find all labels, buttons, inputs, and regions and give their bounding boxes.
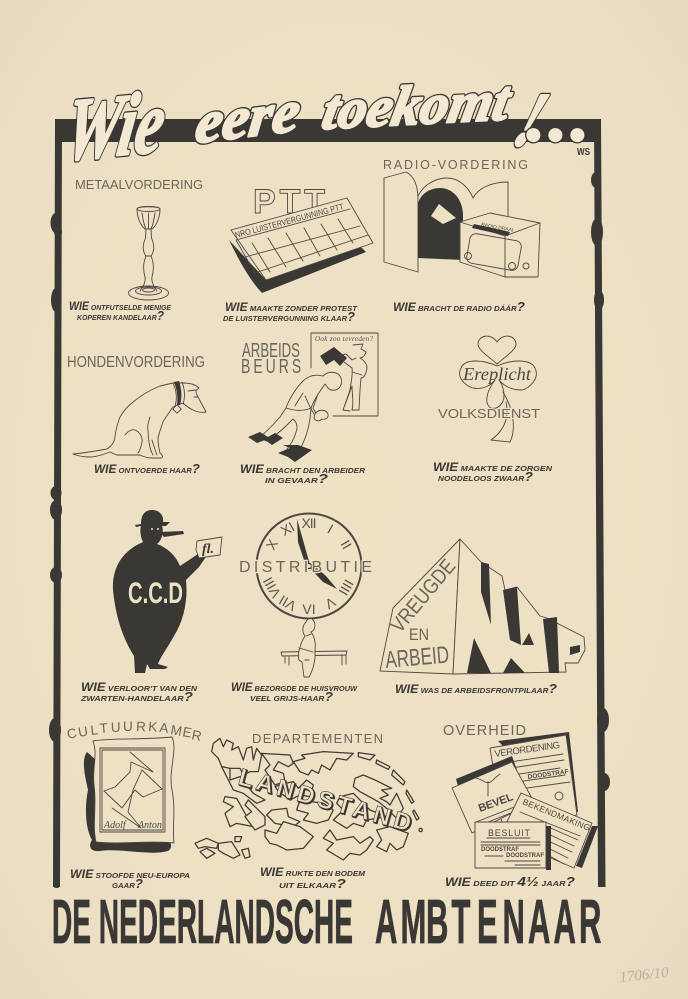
icon: stack of decrees: BESLUIT	[488, 828, 530, 838]
icon: clock: VII	[276, 592, 299, 614]
icon: clock: X	[262, 536, 281, 553]
title: !	[503, 79, 559, 162]
title: eere	[192, 78, 304, 156]
question 1: KOPEREN KANDELAAR?	[77, 308, 164, 323]
question 3: WIE BRACHT DE RADIO DÁÁR ?	[393, 299, 525, 314]
question 2: DE LUISTERVERGUNNING KLAAR?	[223, 309, 355, 324]
icon: framed emblem: Anton	[137, 820, 162, 831]
heading: departementen: DEPARTEMENTEN	[252, 731, 383, 746]
icon: NAF block letters: ARBEID	[384, 642, 450, 674]
title: toekomt	[317, 69, 518, 142]
icon: clock: I	[325, 521, 336, 537]
icon: framed emblem	[84, 737, 174, 853]
question 11: UIT ELKAAR ?	[279, 876, 346, 891]
decorative frame	[49, 119, 610, 888]
icon: NAF block letters	[380, 539, 585, 674]
icon: shattered land map: LANDSTAND	[236, 765, 415, 838]
title: eere	[192, 78, 304, 156]
icon: woman on bench	[281, 619, 347, 677]
icon: NAF block letters: VREUGDE	[386, 555, 460, 637]
heading: distributie: DISTRIBUTIE	[239, 559, 372, 576]
question 2: WIE MAAKTE ZONDER PROTEST	[225, 302, 358, 314]
signature mark: WS	[577, 147, 590, 158]
icon: stack of decrees: DOODSTRAF	[481, 847, 519, 853]
icon: stack of decrees: BEKENDMAKING	[521, 797, 592, 833]
title	[59, 69, 589, 180]
icon: stack of decrees: DOODSTRAF	[527, 768, 569, 781]
icon: doorway and radio: RADIO DRAAI	[481, 222, 514, 234]
question 1: WIE ONTFUTSELDE MENIGE	[69, 301, 172, 313]
question 10	[70, 869, 190, 891]
question 7: WIE VERLOOR'T VAN DEN	[81, 682, 198, 694]
pencil archive number: 1706/10	[619, 965, 670, 986]
icon: fat black marketeer: C.C.D	[128, 577, 183, 610]
heading: cultuurkamer: CULTUURKAMER	[66, 719, 203, 744]
icon: stack of decrees: DOODSTRAF	[506, 853, 544, 859]
icon: clock: VI	[302, 601, 316, 617]
icon: clock: II	[337, 537, 355, 552]
icon: clock: V	[322, 594, 339, 613]
icon: clover	[460, 336, 536, 442]
icon: clock: VIII	[260, 574, 284, 601]
title: ...	[527, 76, 589, 156]
icon: listening licence card: NRO LUISTERVERGUNNING PTT	[234, 201, 345, 240]
question 6: NOODELOOS ZWAAR ?	[438, 469, 533, 484]
icon: clock	[256, 514, 362, 618]
title: Wie	[59, 72, 172, 180]
hollow letters PTT: PTT	[253, 183, 325, 221]
question 2	[223, 302, 358, 324]
question 6: WIE MAAKTE DE ZORGEN	[433, 462, 553, 474]
heading: overheid: OVERHEID	[443, 723, 526, 739]
question 6	[433, 462, 553, 484]
question 5: IN GEVAAR ?	[265, 471, 328, 486]
question 7	[80, 682, 198, 704]
footer title: AMBTENAAR	[375, 889, 601, 957]
icon: doorway and radio	[384, 172, 540, 277]
icon: candlestick	[128, 206, 168, 300]
icon: shattered land map	[195, 738, 422, 860]
icon: clock: IIII	[335, 577, 357, 598]
icon: framed emblem: Adolf	[103, 820, 127, 831]
heading: arbeidsbeurs	[241, 340, 301, 378]
icon: stack of decrees	[452, 732, 598, 870]
title: Wie	[59, 72, 172, 180]
title: toekomt	[317, 69, 518, 142]
icon: listening licence card	[229, 198, 373, 293]
icon: sitting dog	[73, 381, 206, 458]
icon: shattered land map: LANDSTAND	[235, 764, 414, 837]
icon: worker and poster: Ook zoo tevreden?	[315, 335, 374, 343]
question 7: ZWARTEN-HANDELAAR ?	[80, 689, 193, 704]
question 5	[240, 464, 366, 486]
icon: stack of decrees: BEVEL	[477, 791, 515, 815]
heading: radio-vordering: RADIO-VORDERING	[383, 158, 528, 172]
heading: arbeidsbeurs: BEURS	[241, 354, 301, 378]
heading: metaalvordering: METAALVORDERING	[75, 177, 203, 192]
icon: NAF block letters: EN	[409, 625, 429, 644]
question 1	[69, 301, 172, 323]
question 8: WIE BEZORGDE DE HUISVROUW	[231, 682, 358, 694]
icon: clock: XII	[302, 515, 316, 531]
icon: stack of decrees: VERORDENING	[494, 740, 561, 760]
question 11: WIE RUKTE DEN BODEM	[260, 867, 366, 879]
heading: volksdienst: VOLKSDIENST	[438, 406, 540, 421]
icon: worker and poster	[248, 333, 378, 462]
heading: arbeidsbeurs: ARBEIDS	[242, 340, 300, 362]
question 8: VEEL GRIJS-HAAR ?	[250, 689, 333, 704]
question 9: WIE WAS DE ARBEIDSFRONTPILAAR ?	[395, 681, 557, 696]
icon: clock: XI	[278, 519, 297, 539]
question 8	[231, 682, 358, 704]
title: !	[503, 79, 559, 162]
question 5: WIE BRACHT DEN ARBEIDER	[240, 464, 366, 476]
icon: clover: Ereplicht	[462, 364, 532, 384]
question 11	[260, 867, 366, 891]
icon: fat black marketeer: fl.	[202, 542, 214, 557]
question 4: WIE ONTVOERDE HAAR?	[94, 461, 200, 476]
question 12: WIE DEED DIT 4½ JAAR ?	[445, 874, 575, 889]
question 10: WIE STOOFDE NEU-EUROPA	[70, 869, 190, 881]
heading: hondenvordering: HONDENVORDERING	[67, 354, 205, 371]
question 10: GAAR?	[112, 876, 143, 891]
title: ...	[527, 76, 589, 156]
icon: fat black marketeer	[113, 510, 222, 673]
